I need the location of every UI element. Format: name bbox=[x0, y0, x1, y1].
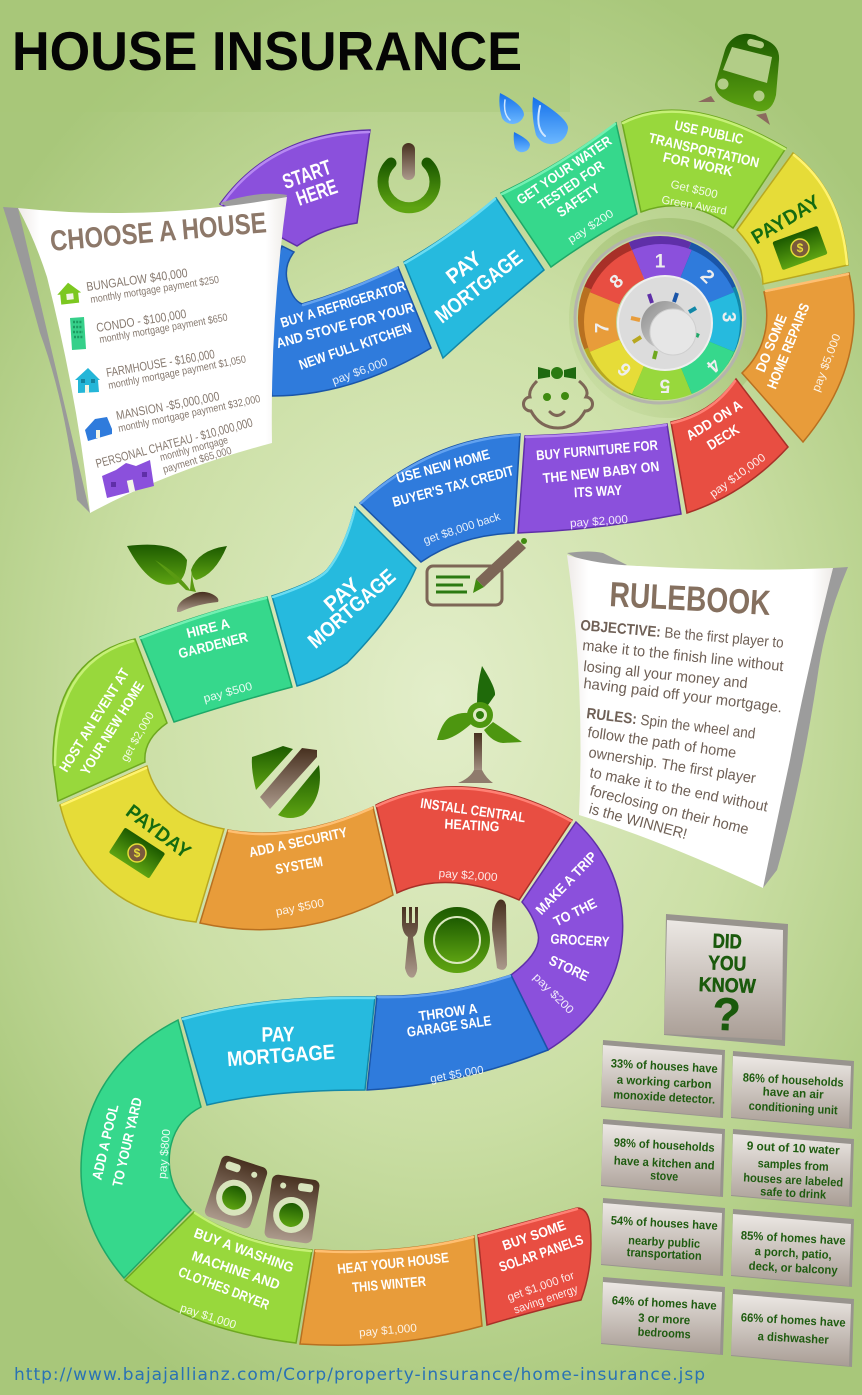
icon: chateau bbox=[102, 460, 154, 498]
wheel shadow ring bbox=[569, 218, 769, 418]
fact card: bedrooms: 64% of homes have bbox=[611, 1293, 717, 1313]
text: objective: OBJECTIVE: Be the first player to bbox=[580, 617, 784, 652]
fact card: porch patio deck bbox=[731, 1209, 854, 1287]
space: pay mortgage 2 bbox=[272, 507, 416, 686]
space: buy some solar panels: SOLAR PANELS bbox=[497, 1231, 585, 1275]
space: payday 2: $ bbox=[134, 846, 141, 860]
spinner wheel: 4 bbox=[702, 354, 724, 376]
space: payday 2: PAYDAY bbox=[121, 801, 195, 864]
title: HOUSE INSURANCE bbox=[12, 20, 522, 82]
space: add on a deck: pay $10,000 bbox=[708, 452, 768, 500]
panel: rulebook bbox=[567, 552, 848, 888]
space: hire a gardener bbox=[140, 597, 292, 722]
fact card: water samples: samples from bbox=[757, 1156, 829, 1174]
space: throw a garage sale: GARAGE SALE bbox=[406, 1012, 492, 1040]
space: buy a refrigerator: BUY A REFRIGERATOR bbox=[279, 277, 407, 331]
text: rules: ownership. The first player bbox=[587, 744, 757, 787]
spinner wheel: 6 bbox=[614, 358, 636, 380]
space: buy some solar panels bbox=[478, 1208, 591, 1325]
space: host an event bbox=[53, 639, 167, 801]
space: use public transportation: Get $500 bbox=[669, 179, 719, 201]
list: house options: PERSONAL CHATEAU - $10,000,000 bbox=[94, 415, 254, 471]
space: pay mortgage 3 bbox=[182, 997, 375, 1105]
space: heat your house: pay $1,000 bbox=[359, 1322, 417, 1340]
space: install central heating: INSTALL CENTRAL bbox=[419, 795, 527, 825]
space: do some home repairs: HOME REPAIRS bbox=[764, 301, 812, 391]
spinner wheel: 8 bbox=[606, 271, 628, 293]
list: house options: payment $65,000 bbox=[162, 445, 233, 476]
space: host an event: YOUR NEW HOME bbox=[77, 678, 147, 778]
icon: power button bbox=[383, 143, 435, 208]
space: use public transportation bbox=[622, 110, 786, 228]
space: get your water tested bbox=[501, 123, 637, 267]
fact card: carbon monoxide: monoxide detector. bbox=[613, 1087, 716, 1107]
fact card: air conditioning: have an air bbox=[762, 1084, 824, 1102]
text: rules: is the WINNER! bbox=[587, 800, 689, 843]
space: add a pool bbox=[81, 1020, 201, 1278]
text: objective: having paid off your mortgage. bbox=[583, 675, 783, 716]
fact card: public transportation: nearby public bbox=[628, 1233, 701, 1251]
fact card: kitchen and stove: stove bbox=[650, 1168, 679, 1184]
fact card: carbon monoxide bbox=[601, 1040, 725, 1118]
space: payday 1 bbox=[737, 153, 848, 284]
space: heat your house bbox=[300, 1236, 482, 1345]
space: do some home repairs bbox=[742, 273, 854, 442]
list: house options: CONDO - $100,000 bbox=[95, 307, 187, 335]
fact card: water samples: houses are labeled bbox=[743, 1170, 844, 1190]
space: buy furniture: BUY FURNITURE FOR bbox=[536, 437, 658, 463]
fact card: dishwasher: a dishwasher bbox=[757, 1329, 829, 1347]
space: use new home buyer's tax credit: get $8,000 back bbox=[422, 511, 502, 547]
space: pay mortgage 1 bbox=[404, 198, 544, 358]
fact card: porch patio deck: deck, or balcony bbox=[748, 1259, 838, 1277]
space: make a trip to the grocery store: TO THE bbox=[551, 895, 599, 929]
spinner wheel: 5 bbox=[659, 374, 670, 396]
fact card: public transportation: 54% of houses have bbox=[610, 1213, 718, 1233]
space: use public transportation: TRANSPORTATION bbox=[647, 129, 761, 171]
source url: http://www.bajajallianz.com/Corp/property-insurance/home-insurance.jsp bbox=[14, 1365, 705, 1385]
text: rules: foreclosing on their home bbox=[588, 782, 750, 838]
space: payday 1: $ bbox=[797, 241, 804, 255]
icon: condo bbox=[70, 317, 86, 350]
space: throw a garage sale bbox=[367, 975, 548, 1090]
space: make a trip to the grocery store: GROCERY bbox=[550, 930, 610, 950]
space: hire a gardener: HIRE A bbox=[185, 615, 231, 641]
space: pay mortgage 1: MORTGAGE bbox=[431, 246, 527, 328]
space: buy some solar panels: saving energy bbox=[512, 1283, 580, 1317]
space: throw a garage sale: THROW A bbox=[418, 1000, 478, 1024]
list: house options: monthly mortgage bbox=[159, 434, 230, 464]
space: pay mortgage 2: MORTGAGE bbox=[304, 565, 400, 653]
space: buy some solar panels: get $1,000 for bbox=[506, 1270, 576, 1304]
space: payday 1: PAYDAY bbox=[748, 191, 825, 249]
icon: bungalow bbox=[56, 281, 82, 305]
space: buy a washing machine: MACHINE AND bbox=[190, 1247, 282, 1293]
fact card: water samples bbox=[731, 1129, 854, 1207]
did you know card: ? bbox=[712, 988, 742, 1040]
fact card: kitchen and stove: 98% of households bbox=[613, 1135, 715, 1155]
list: house options: monthly mortgage payment $250 bbox=[90, 274, 220, 306]
space: hire a gardener: GARDENER bbox=[177, 629, 249, 661]
space: buy furniture: ITS WAY bbox=[574, 482, 623, 500]
list: house options: FARMHOUSE - $160,000 bbox=[105, 347, 216, 380]
icon: check and pen bbox=[427, 538, 527, 605]
heading: choose a house: CHOOSE A HOUSE bbox=[49, 207, 268, 258]
space: buy a washing machine: pay $1,000 bbox=[179, 1302, 237, 1332]
space: pay mortgage 3: PAY bbox=[261, 1023, 295, 1047]
space: add a security system: pay $500 bbox=[275, 897, 325, 919]
space: host an event: get $2,000 bbox=[119, 710, 157, 764]
text: rules: follow the path of home bbox=[586, 724, 737, 762]
icon: farmhouse bbox=[75, 368, 100, 393]
did you know card: YOU bbox=[708, 952, 747, 976]
list: house options: monthly mortgage payment $650 bbox=[98, 312, 229, 346]
space: heat your house: THIS WINTER bbox=[351, 1273, 427, 1295]
space: buy a washing machine bbox=[125, 1212, 312, 1343]
list: house options: MANSION -$5,000,000 bbox=[115, 389, 221, 423]
space: do some home repairs: DO SOME bbox=[752, 312, 790, 374]
did you know card: DID bbox=[712, 931, 742, 954]
fact card: dishwasher: 66% of homes have bbox=[740, 1310, 846, 1330]
space: pay mortgage 3: MORTGAGE bbox=[226, 1041, 336, 1071]
fact card: air conditioning: 86% of households bbox=[742, 1070, 844, 1090]
icon: plant bbox=[127, 545, 227, 612]
space: install central heating: HEATING bbox=[444, 816, 500, 834]
space: get your water tested: GET YOUR WATER bbox=[514, 132, 614, 208]
space: throw a garage sale: get $5,000 bbox=[429, 1064, 485, 1086]
space: pay mortgage 1: PAY bbox=[442, 247, 486, 289]
spinner wheel: 2 bbox=[696, 266, 718, 288]
space: add a pool: pay $800 bbox=[157, 1129, 173, 1179]
space: make a trip to the grocery store: pay $200 bbox=[530, 971, 576, 1017]
space: use new home buyer's tax credit: USE NEW HOME bbox=[395, 446, 491, 486]
text: objective bbox=[580, 617, 785, 716]
space: buy a washing machine: BUY A WASHING bbox=[192, 1225, 296, 1276]
space: start here: HERE bbox=[293, 175, 341, 211]
space: use public transportation: USE PUBLIC bbox=[673, 117, 745, 147]
fact card: porch patio deck: 85% of homes have bbox=[740, 1228, 846, 1248]
fact card: carbon monoxide: 33% of houses have bbox=[610, 1056, 718, 1076]
space: make a trip to the grocery store bbox=[511, 822, 623, 1050]
fact card: public transportation: transportation bbox=[626, 1245, 702, 1263]
list: house options bbox=[85, 266, 262, 476]
space: pay mortgage 2: PAY bbox=[320, 574, 364, 616]
fact card: carbon monoxide: a working carbon bbox=[616, 1073, 712, 1091]
space: use new home buyer's tax credit bbox=[360, 434, 520, 562]
space: get your water tested: TESTED FOR bbox=[535, 157, 607, 213]
list: house options: monthly mortgage payment $1,050 bbox=[107, 353, 247, 392]
fact card: water samples: safe to drink bbox=[760, 1184, 827, 1202]
space: get your water tested: SAFETY bbox=[554, 180, 603, 220]
did you know card bbox=[664, 914, 788, 1046]
text: rules: to make it to the end without bbox=[588, 764, 770, 816]
space: install central heating: pay $2,000 bbox=[438, 868, 498, 884]
space: add a security system bbox=[200, 807, 393, 930]
space: buy a washing machine: CLOTHES DRYER bbox=[176, 1263, 272, 1313]
list: house options: BUNGALOW $40,000 bbox=[85, 266, 188, 294]
space: buy a refrigerator bbox=[262, 246, 431, 396]
fact card: bedrooms: 3 or more bbox=[638, 1311, 691, 1327]
fact card: dishwasher bbox=[731, 1289, 854, 1367]
icon: washer and dryer bbox=[203, 1154, 320, 1244]
space: buy furniture: pay $2,000 bbox=[570, 514, 628, 530]
icon: wind turbine bbox=[437, 666, 522, 783]
spinner wheel: 7 bbox=[592, 323, 614, 333]
space: add a security system: ADD A SECURITY bbox=[247, 824, 349, 860]
space: buy some solar panels: BUY SOME bbox=[500, 1217, 568, 1253]
space: install central heating bbox=[376, 787, 572, 900]
icon: fork plate knife bbox=[402, 900, 507, 978]
fact card: kitchen and stove: have a kitchen and bbox=[613, 1153, 715, 1173]
text: objective: losing all your money and bbox=[583, 658, 748, 692]
fact card: bedrooms: bedrooms bbox=[637, 1325, 691, 1341]
space: host an event: HOST AN EVENT AT bbox=[56, 665, 133, 775]
space: buy furniture bbox=[518, 424, 681, 533]
space: hire a gardener: pay $500 bbox=[202, 681, 254, 705]
icon: train bbox=[698, 34, 779, 125]
heading: rulebook: RULEBOOK bbox=[609, 575, 771, 623]
spinner wheel: 1 bbox=[655, 252, 666, 272]
space: add on a deck: ADD ON A bbox=[683, 397, 745, 443]
fact card: air conditioning bbox=[731, 1051, 854, 1129]
spinner wheel bbox=[575, 233, 745, 403]
icon: mansion bbox=[85, 417, 112, 441]
space: add on a deck: DECK bbox=[704, 421, 742, 453]
space: use public transportation: FOR WORK bbox=[662, 149, 734, 179]
space: buy a refrigerator: NEW FULL KITCHEN bbox=[297, 319, 413, 373]
text: objective: make it to the finish line without bbox=[582, 637, 785, 675]
space: buy furniture: THE NEW BABY ON bbox=[542, 458, 660, 486]
space: start here bbox=[220, 130, 370, 246]
icon: shield bbox=[252, 746, 320, 818]
icon: baby face bbox=[523, 367, 593, 428]
space: make a trip to the grocery store: STORE bbox=[547, 952, 591, 984]
icon: water drops bbox=[499, 93, 568, 152]
space: add a pool: TO YOUR YARD bbox=[109, 1096, 145, 1188]
fact card: bedrooms bbox=[601, 1277, 725, 1355]
space: add on a deck bbox=[671, 379, 788, 513]
space: heat your house: HEAT YOUR HOUSE bbox=[336, 1249, 450, 1277]
text: rules: RULES: Spin the wheel and bbox=[586, 705, 756, 743]
space: use public transportation: Green Award bbox=[660, 194, 728, 218]
space: use new home buyer's tax credit: BUYER'S TAX CREDIT bbox=[391, 462, 516, 510]
spinner wheel: 3 bbox=[718, 312, 738, 322]
space: make a trip to the grocery store: MAKE A TRIP bbox=[532, 848, 600, 918]
space: do some home repairs: pay $5,000 bbox=[810, 332, 844, 394]
fact card: air conditioning: conditioning unit bbox=[748, 1099, 838, 1117]
fact card: kitchen and stove bbox=[601, 1119, 725, 1197]
fact card: public transportation bbox=[601, 1198, 725, 1276]
panel: choose a house bbox=[3, 194, 287, 513]
space: buy a refrigerator: pay $6,000 bbox=[331, 356, 389, 388]
space: buy a refrigerator: AND STOVE FOR YOUR bbox=[274, 299, 416, 351]
space: start here: START bbox=[280, 156, 334, 194]
space: get your water tested: pay $200 bbox=[566, 208, 616, 246]
did you know card: KNOW bbox=[698, 974, 756, 998]
fact card: water samples: 9 out of 10 water bbox=[746, 1139, 840, 1157]
space: payday 2 bbox=[60, 766, 224, 922]
space: add a pool: ADD A POOL bbox=[89, 1102, 122, 1181]
list: house options: monthly mortgage payment $32,000 bbox=[117, 393, 262, 435]
space: add a security system: SYSTEM bbox=[274, 853, 324, 877]
fact card: porch patio deck: a porch, patio, bbox=[754, 1244, 832, 1262]
text: rules bbox=[586, 705, 770, 843]
